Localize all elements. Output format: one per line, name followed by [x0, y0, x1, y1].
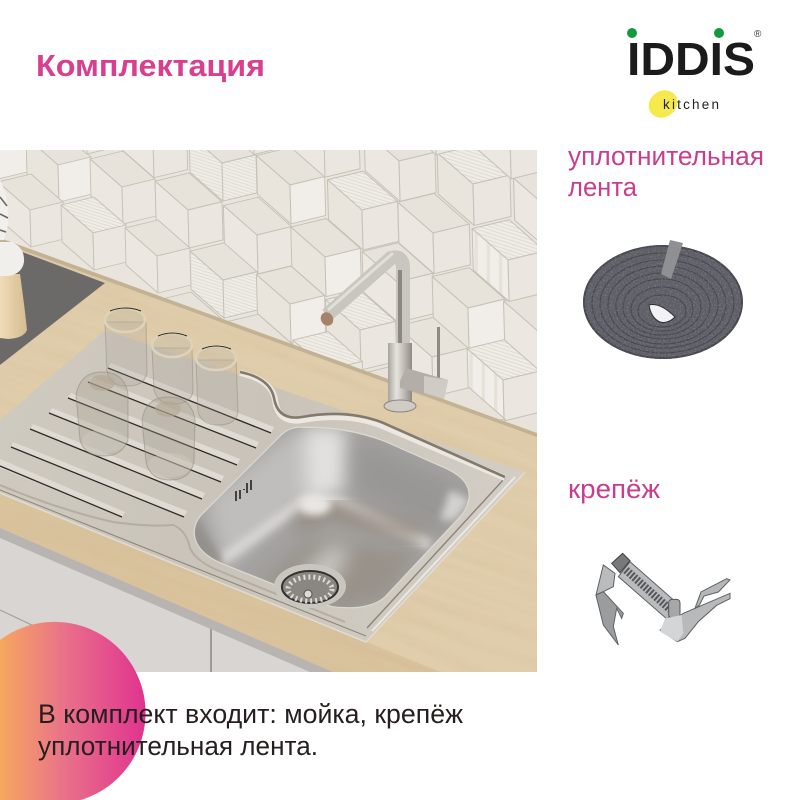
icon: yellow kitchen blob [643, 85, 683, 123]
lever handle [400, 368, 448, 399]
wall tiles [0, 150, 537, 433]
adjuster knob [669, 599, 680, 618]
body text: уплотнительная лента. [38, 731, 318, 761]
drain strainer [274, 564, 346, 608]
mill top [0, 242, 24, 276]
product image: metal fastening clip [596, 553, 730, 645]
pepper mill and plates [0, 180, 27, 339]
gradient circle [0, 622, 146, 800]
drainer ribs [0, 363, 274, 517]
body text: В комплект входит: мойка, крепёж [38, 699, 463, 729]
glass 1 [105, 308, 147, 386]
tape end tab [661, 240, 683, 279]
faucet base [388, 343, 412, 405]
sink basin [194, 426, 470, 608]
glass 3 [196, 346, 238, 425]
left hook plate [596, 565, 615, 595]
faucet [318, 253, 448, 412]
heading: sealing tape: лента [568, 172, 638, 202]
glass 5 [142, 397, 195, 480]
perforated band [618, 562, 677, 619]
heading: fasteners: крепёж [568, 474, 660, 504]
logo dot: first [627, 28, 637, 38]
stacked plates [0, 180, 8, 240]
registered mark: ® [754, 29, 762, 40]
title: Комплектация [36, 48, 265, 83]
product image: sealing tape roll [583, 240, 743, 359]
photo: kitchen sink [0, 150, 537, 672]
logo wordmark: IDDIS [627, 33, 755, 85]
logo dot: second [714, 28, 724, 38]
cabinet front [0, 528, 333, 672]
tape centre hole [649, 304, 675, 322]
overflow slots [236, 480, 251, 501]
glass 4 [76, 372, 128, 456]
faucet spout [327, 257, 403, 345]
logo subtitle: kitchen [663, 97, 719, 112]
lever pin [437, 327, 440, 379]
drainboard raised border [0, 485, 345, 622]
glasses [76, 308, 238, 480]
heading: sealing tape: уплотнительная [568, 141, 764, 171]
slate board [0, 244, 105, 365]
rim groove [240, 373, 505, 478]
glass 2 [152, 333, 193, 404]
sink plate [0, 332, 525, 642]
wooden countertop [0, 240, 537, 672]
right base [660, 593, 730, 642]
mill body [0, 274, 27, 339]
spout outlet [320, 312, 334, 326]
top hook [612, 553, 630, 573]
logo: IDDIS kitchen [627, 28, 762, 123]
